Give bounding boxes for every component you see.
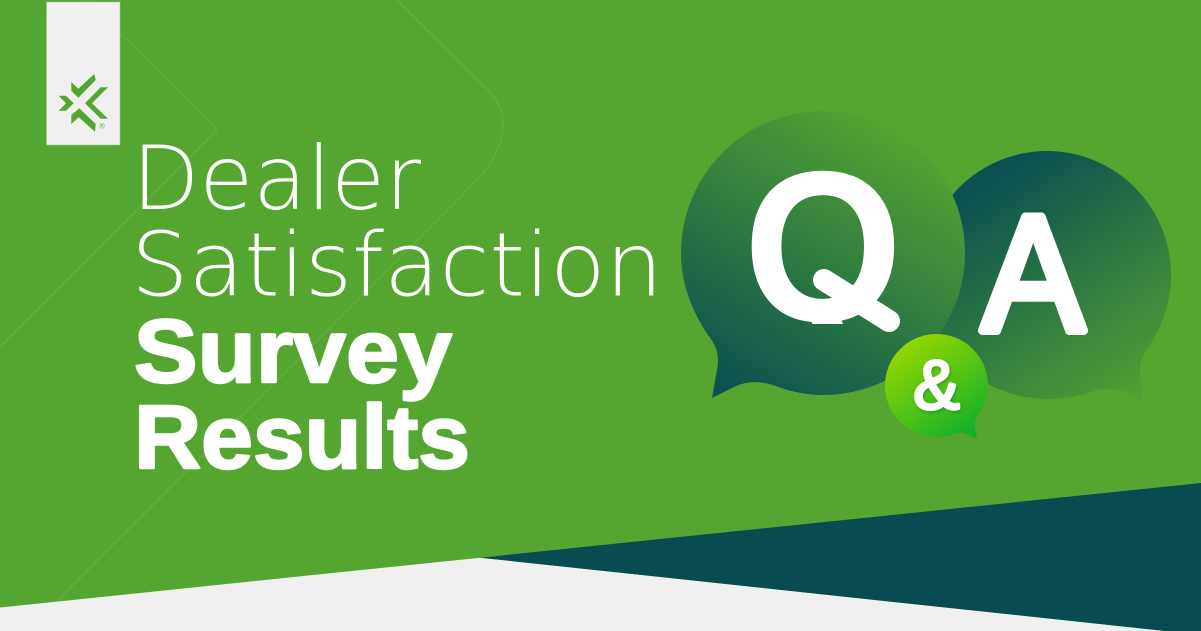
- letter Q: Q: [743, 126, 903, 367]
- ampersand speech bubble: [885, 334, 988, 439]
- letter Q: [752, 170, 900, 332]
- letter A: A: [982, 181, 1084, 366]
- answer speech bubble: [923, 151, 1171, 402]
- title: Dealer: [132, 127, 422, 230]
- ampersand: &: [913, 346, 960, 424]
- title: Satisfaction: [131, 214, 663, 316]
- title: Results: [134, 388, 470, 488]
- logo tab: [46, 2, 120, 145]
- bottom teal wedge: [480, 483, 1201, 631]
- bottom light band: [0, 558, 1165, 631]
- title: [131, 127, 663, 488]
- icon: logo mark: [59, 74, 108, 132]
- title: Survey: [134, 302, 452, 402]
- question speech bubble: [681, 111, 965, 398]
- icon: logo mark: ®: [99, 121, 105, 130]
